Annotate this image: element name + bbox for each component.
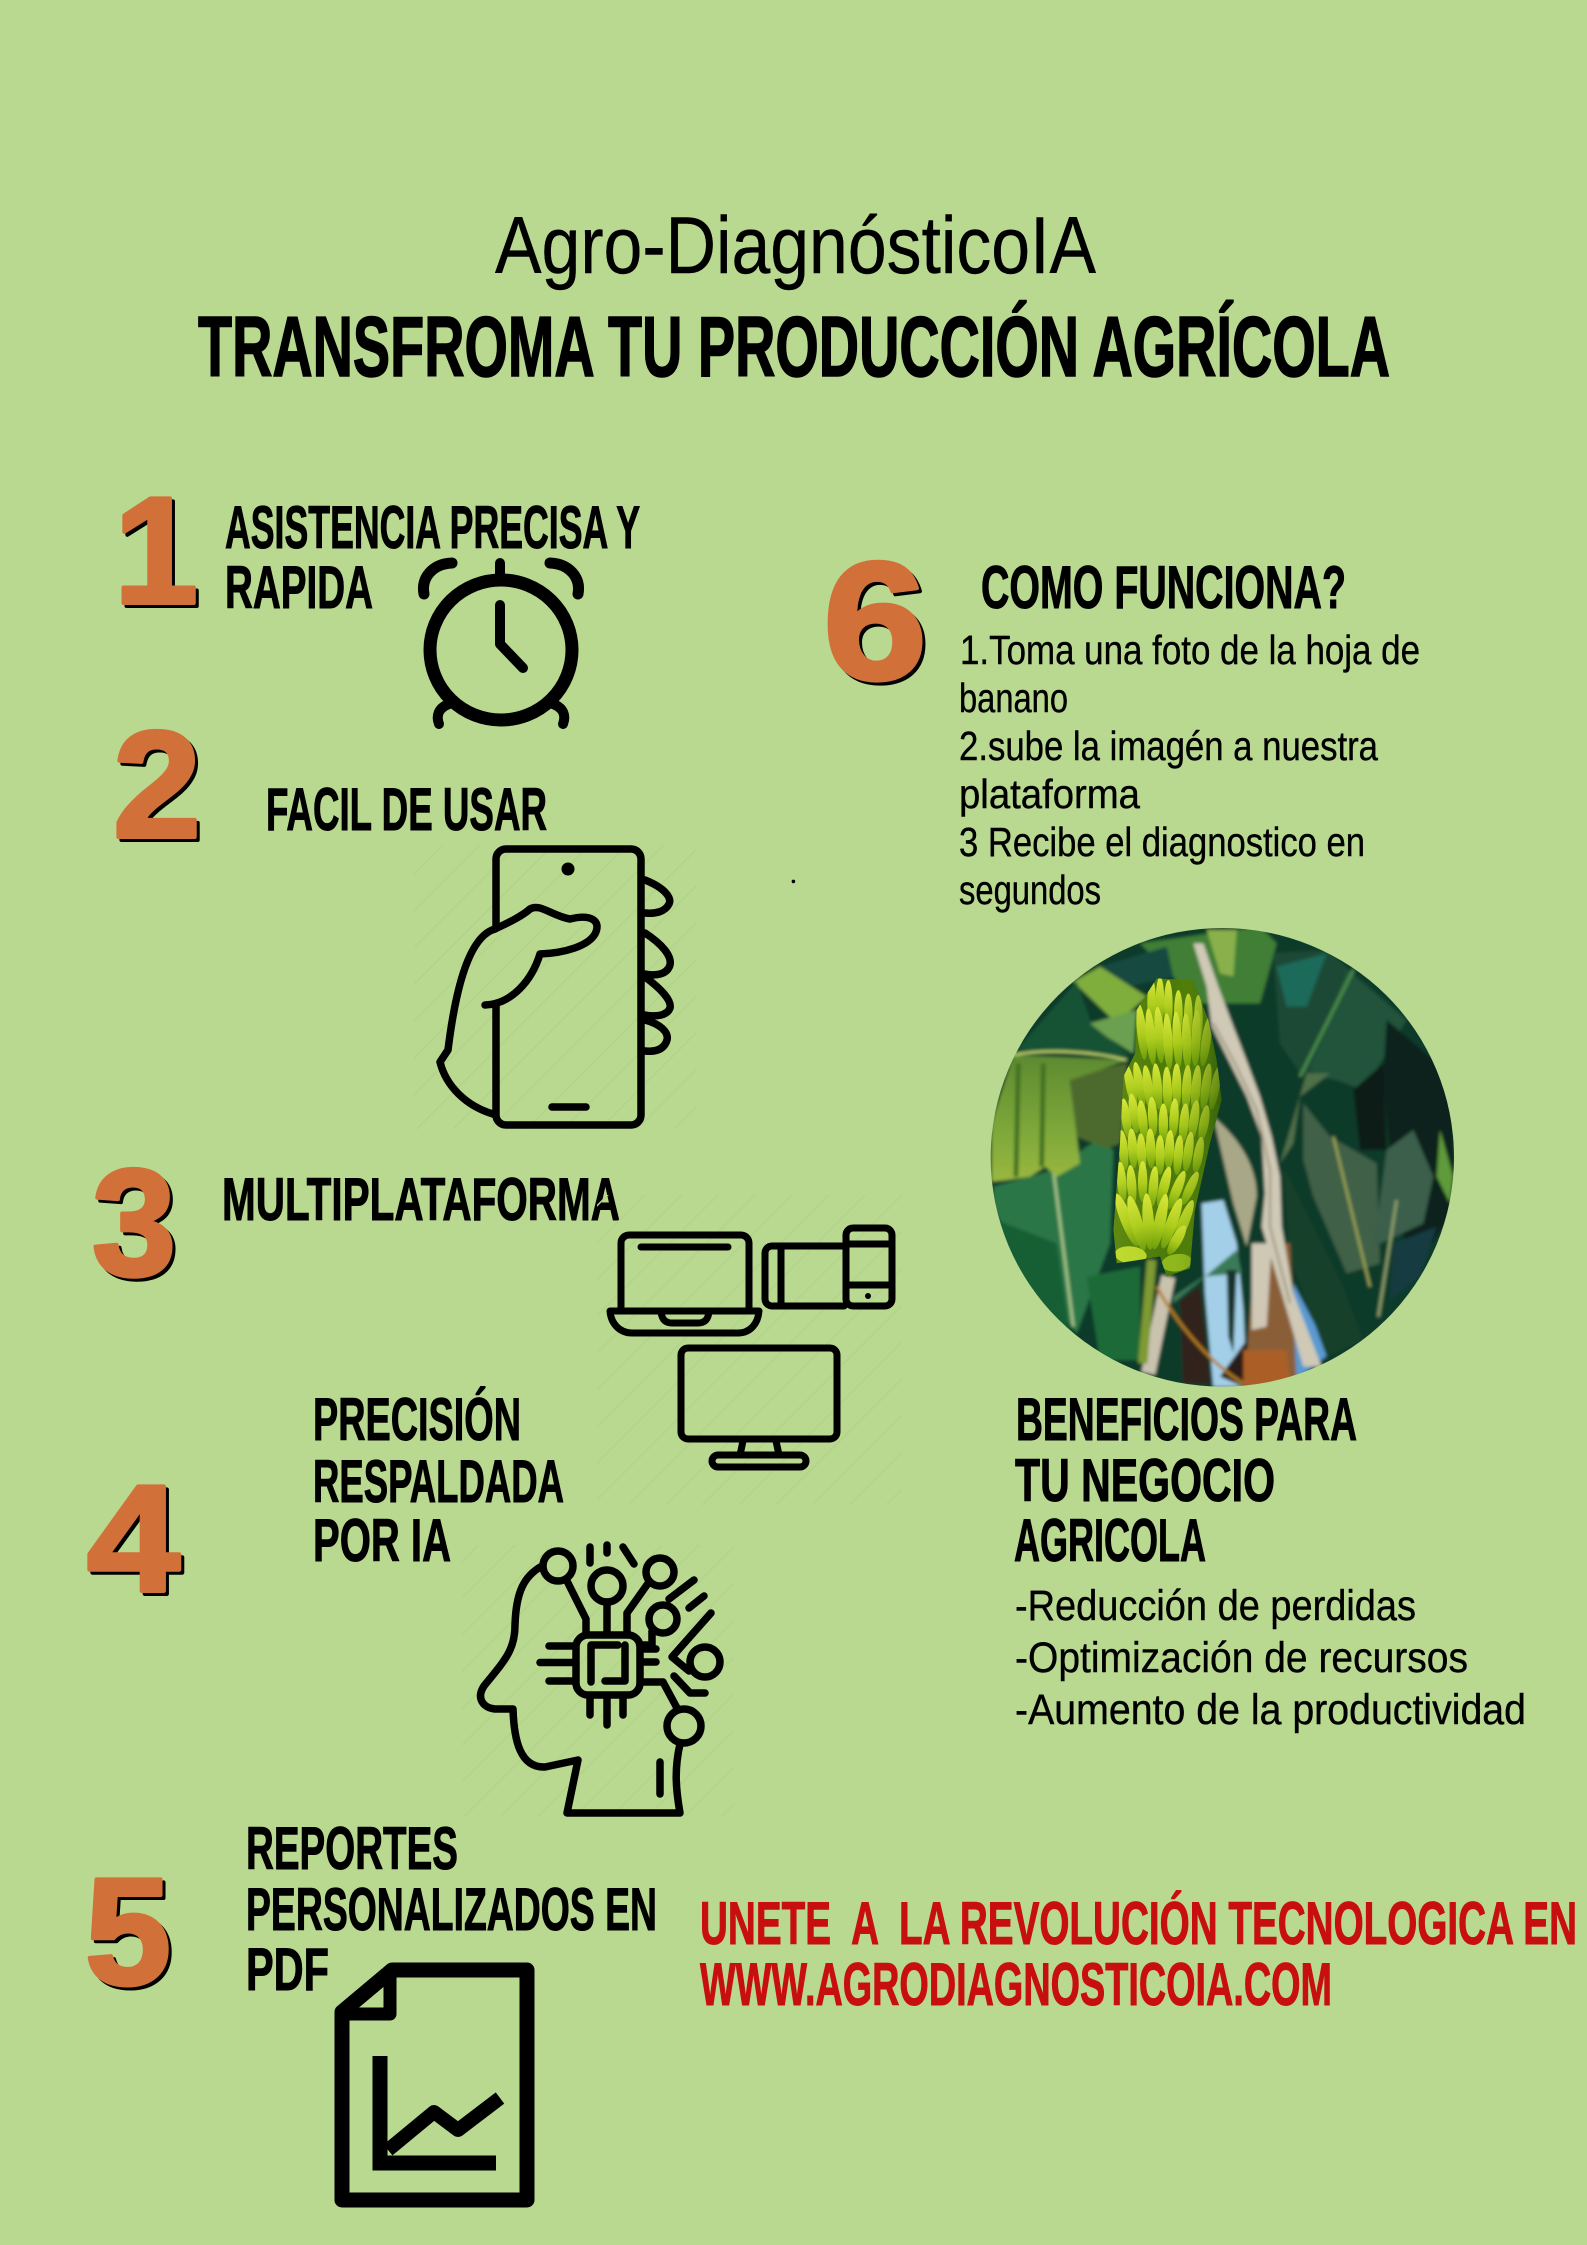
- steps text: 3 Recibe el diagnostico en: [959, 819, 1365, 865]
- benefits list: -Optimización de recursos: [1015, 1634, 1468, 1682]
- heading beneficios: TU NEGOCIO: [1015, 1447, 1275, 1514]
- number 5: 5: [85, 1847, 171, 2017]
- number 3: 3: [92, 1138, 176, 1308]
- tablet and phone: [765, 1228, 892, 1306]
- steps text: banano: [959, 675, 1068, 721]
- heading 5: PDF: [246, 1936, 329, 2003]
- number 5: 5: [88, 1850, 174, 2020]
- icon: report document with chart: [342, 1970, 527, 2200]
- steps text: 1.Toma una foto de la hoja de: [960, 627, 1420, 673]
- heading 5: REPORTES: [246, 1815, 458, 1882]
- icon: hand holding phone: [414, 845, 696, 1129]
- section 1: asistencia precisa y rapida: [114, 466, 640, 724]
- monitor: [681, 1348, 837, 1467]
- section 2: facil de usar: [113, 700, 795, 1129]
- section 6: como funciona: [823, 527, 1420, 913]
- section: beneficios: [1014, 1386, 1526, 1734]
- number 6: 6: [826, 530, 930, 718]
- number 4: 4: [90, 1457, 183, 1627]
- benefits list: -Reducción de perdidas: [1015, 1582, 1416, 1630]
- heading beneficios: AGRICOLA: [1014, 1507, 1206, 1574]
- number 2: 2: [113, 700, 201, 870]
- heading 1: RAPIDA: [225, 554, 373, 621]
- call to action: [700, 1890, 1577, 2018]
- heading 1: ASISTENCIA PRECISA Y: [225, 494, 640, 561]
- heading 2: FACIL DE USAR: [266, 776, 547, 843]
- laptop: [610, 1235, 759, 1333]
- title: Agro-DiagnósticoIA: [495, 201, 1096, 291]
- section 3: multiplataforma: [92, 1138, 902, 1505]
- steps text: 2.sube la imagén a nuestra: [959, 723, 1378, 769]
- benefits list: [1015, 1582, 1526, 1734]
- steps text: plataforma: [959, 771, 1140, 817]
- heading 3: MULTIPLATAFORMA: [222, 1166, 620, 1233]
- stray dot: [792, 880, 795, 883]
- heading beneficios: BENEFICIOS PARA: [1016, 1386, 1357, 1453]
- icon: alarm clock: [424, 563, 578, 724]
- heading 6: COMO FUNCIONA?: [981, 554, 1346, 621]
- heading 1: [225, 494, 640, 621]
- section 5: reportes personalizados: [85, 1815, 657, 2200]
- icon: devices: [597, 1195, 902, 1505]
- number 3: 3: [95, 1141, 179, 1311]
- number 2: 2: [116, 703, 204, 873]
- section 4: precision respaldada por IA: [87, 1386, 734, 1816]
- icon: AI head with chip: [462, 1545, 734, 1816]
- photo: banana bunch on tree in circle: [980, 920, 1467, 1393]
- steps text: [959, 627, 1420, 913]
- heading beneficios: [1014, 1386, 1357, 1574]
- number 1: 1: [114, 466, 198, 636]
- benefits list: -Aumento de la productividad: [1015, 1686, 1526, 1734]
- heading 4: RESPALDADA: [313, 1448, 564, 1515]
- heading 4: PRECISIÓN: [313, 1386, 521, 1453]
- number 6: 6: [823, 527, 927, 715]
- heading 5: PERSONALIZADOS EN: [246, 1876, 657, 1943]
- steps text: segundos: [959, 867, 1101, 913]
- heading 4: [313, 1386, 564, 1574]
- heading 4: POR IA: [313, 1507, 451, 1574]
- number 4: 4: [87, 1454, 180, 1624]
- number 1: 1: [117, 469, 201, 639]
- heading 5: [246, 1815, 657, 2003]
